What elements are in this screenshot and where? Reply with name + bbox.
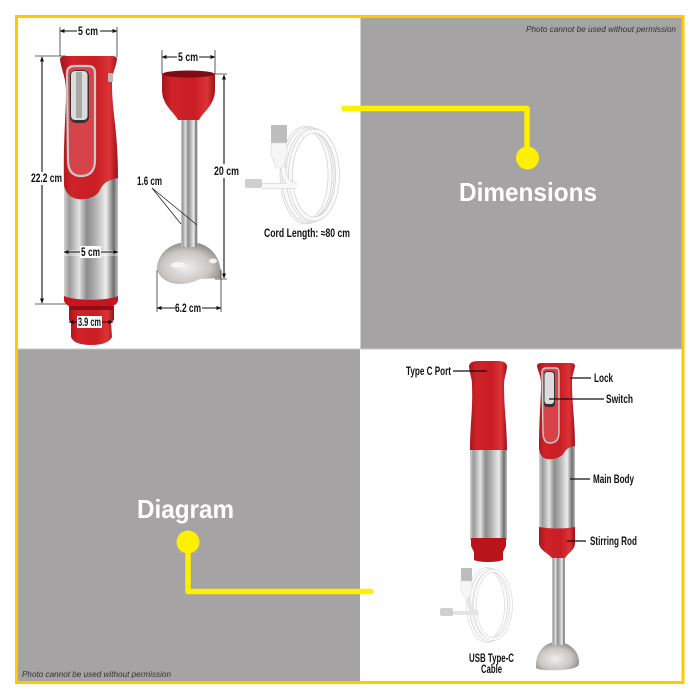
label: 3.9 cm: 3.9 cm xyxy=(78,317,101,329)
red base ring xyxy=(64,296,118,306)
shaft xyxy=(181,120,198,247)
callout: Cable: Cable xyxy=(481,664,502,676)
product: blade attachment xyxy=(157,70,221,284)
steel section xyxy=(64,176,118,300)
label: 5 cm top: 5 cm xyxy=(78,26,98,38)
connector: diagram xyxy=(176,530,371,592)
product: coiled USB cable small xyxy=(440,568,511,641)
product: assembled blender xyxy=(536,363,579,670)
photo notice bottom: Photo cannot be used without permission xyxy=(22,669,171,679)
red cap xyxy=(69,306,114,345)
label: 6.2 cm: 6.2 cm xyxy=(175,303,201,315)
dimension annotations xyxy=(31,26,350,329)
callout: Lock: Lock xyxy=(594,373,613,385)
heading: Diagram: Diagram xyxy=(137,494,234,524)
label: 1.6 cm: 1.6 cm xyxy=(137,176,162,188)
red grip xyxy=(60,56,118,199)
product: coiled USB cable xyxy=(245,125,338,222)
control panel xyxy=(67,66,95,176)
product: hand blender body with dimensions xyxy=(60,56,118,345)
red cup xyxy=(162,71,215,120)
diagram callouts xyxy=(406,366,637,676)
label: 5 cm cup: 5 cm xyxy=(178,52,198,64)
photo notice top: Photo cannot be used without permission xyxy=(526,24,676,34)
product: blender rear view xyxy=(469,361,507,562)
label: cord length: Cord Length: ≈80 cm xyxy=(264,228,350,240)
label: 20 cm: 20 cm xyxy=(214,166,239,178)
callout: Main Body: Main Body xyxy=(593,474,634,486)
callout: USB Type-C: USB Type-C xyxy=(469,653,514,665)
bell guard xyxy=(157,242,221,284)
callout: Type C Port: Type C Port xyxy=(406,366,451,378)
connector: dimensions xyxy=(344,108,539,170)
callout: Stirring Rod: Stirring Rod xyxy=(590,536,637,548)
label: 5 cm body: 5 cm xyxy=(81,247,100,259)
label: 22.2 cm: 22.2 cm xyxy=(31,173,62,185)
heading: Dimensions: Dimensions xyxy=(459,177,597,207)
switch xyxy=(70,70,89,123)
callout: Switch: Switch xyxy=(606,394,633,406)
lock xyxy=(108,73,113,82)
